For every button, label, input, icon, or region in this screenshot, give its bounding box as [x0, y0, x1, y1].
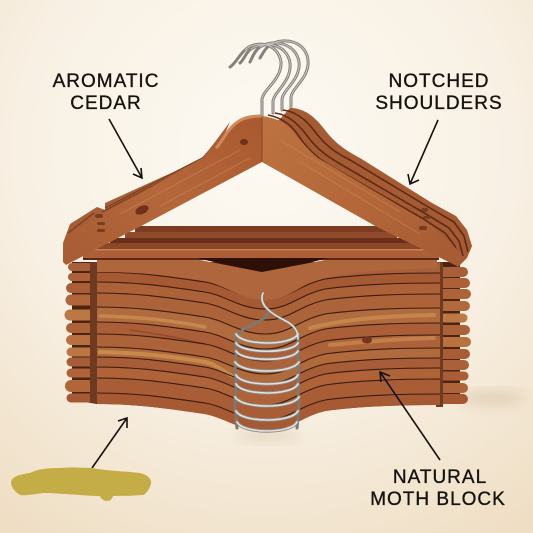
slat shadow lines — [97, 272, 440, 420]
stacked lower hangers — [70, 258, 466, 431]
hook back — [230, 41, 308, 117]
wood knot — [362, 336, 372, 344]
callout: aromatic cedar — [53, 71, 159, 178]
right end pieces — [441, 272, 466, 399]
callout arrow: lower left — [92, 418, 127, 468]
coil back and sides — [235, 293, 299, 428]
callout: notched shoulders — [375, 71, 503, 184]
top curved slat — [97, 260, 437, 300]
notches — [95, 208, 430, 232]
redaction blob — [11, 468, 151, 501]
callout: aromatic cedar: AROMATIC — [53, 71, 159, 92]
metal hooks on top hangers — [230, 41, 308, 117]
coil rings — [235, 334, 299, 431]
callout: natural moth block — [370, 372, 506, 510]
callout: notched shoulders: SHOULDERS — [375, 93, 503, 114]
grain — [120, 140, 420, 234]
floor shadow — [236, 391, 526, 441]
callout: natural moth block: MOTH BLOCK — [370, 489, 506, 510]
rail stack behind the top hangers — [83, 226, 439, 260]
callout: aromatic cedar: CEDAR — [70, 93, 142, 114]
centre seam and shoulder highlight — [261, 116, 263, 162]
dark base of stack — [72, 262, 460, 431]
front hanger, right arm — [262, 116, 462, 266]
back hanger gaps, left side — [68, 156, 206, 233]
callout: notched shoulders: NOTCHED — [389, 71, 489, 92]
back hanger body, right side — [270, 108, 472, 267]
knots — [134, 203, 150, 217]
coil highlights — [235, 293, 299, 431]
end-piece dark gaps — [90, 262, 97, 403]
top hangers — [63, 108, 472, 267]
callout: natural moth block: NATURAL — [393, 467, 487, 488]
back hanger gaps, right side — [268, 110, 468, 260]
back hanger body, left side — [63, 122, 230, 258]
opening at shoulders — [197, 258, 328, 274]
curved slats — [97, 267, 440, 426]
front hanger, left arm — [63, 116, 262, 265]
wire coil of stacked hooks — [235, 293, 299, 431]
hook highlight — [245, 41, 308, 117]
wood streaks — [100, 315, 434, 376]
left end pieces — [70, 267, 92, 398]
